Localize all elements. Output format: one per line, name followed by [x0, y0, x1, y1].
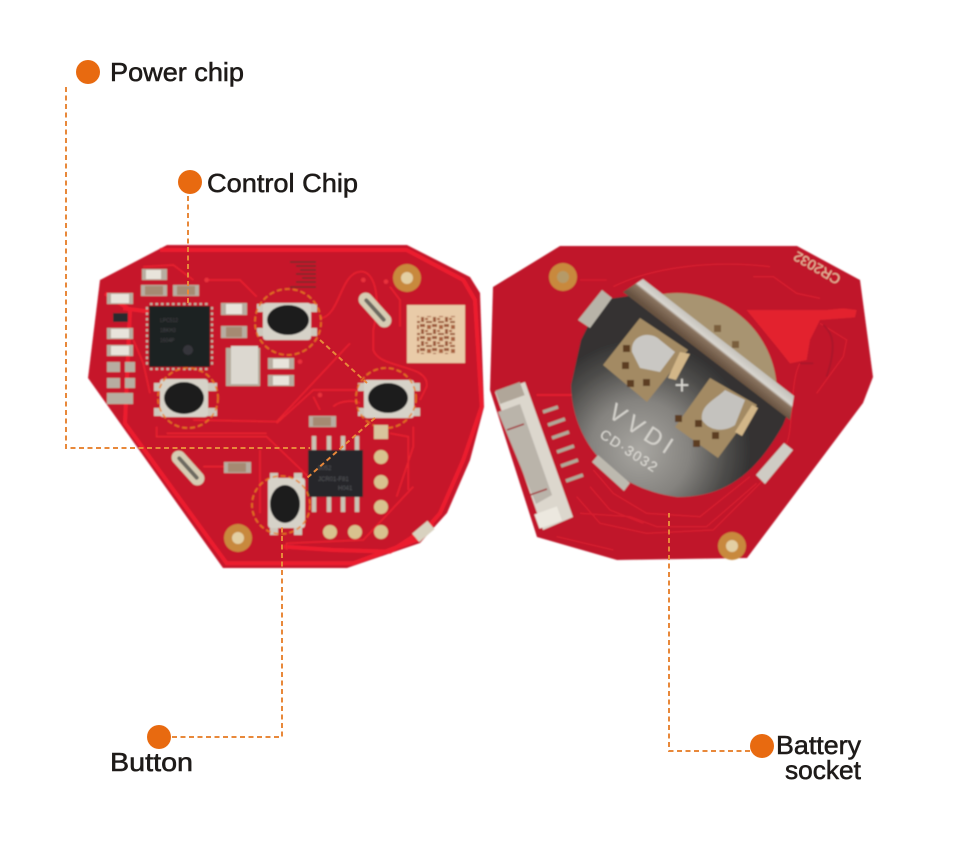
silkscreen: CR2032: CR2032 [791, 248, 843, 288]
embossed VVDI: VVDI [603, 398, 682, 462]
QR label [407, 305, 465, 363]
oval crystals [169, 290, 394, 488]
callout: Power chip [66, 57, 375, 478]
embossed cell code: CD·3032 [597, 426, 662, 476]
embossed plus sign: + [674, 370, 690, 400]
battery window 1 [603, 318, 690, 402]
battery disc behind holder [577, 293, 777, 493]
power chip: H041 [338, 486, 353, 492]
board outline [88, 245, 484, 568]
power chip: 8052 [318, 466, 332, 472]
button, left [154, 368, 218, 428]
retaining bar [623, 279, 794, 420]
button, top [255, 289, 321, 355]
callout: Battery socket: socket [785, 755, 862, 785]
callout: Battery socket [669, 513, 862, 785]
mounting hole, top [549, 263, 577, 291]
callout: Button [110, 527, 282, 777]
callout: Control Chip: Control Chip [207, 168, 358, 198]
holder tab, top [578, 290, 612, 328]
mounting hole, top [393, 264, 421, 292]
board outline [490, 246, 873, 560]
holder tab, bottom right [756, 443, 793, 484]
callout: Button: Button [110, 747, 193, 777]
battery connector [495, 382, 583, 530]
battery window 2 [675, 378, 758, 458]
power chip [308, 436, 363, 512]
control chip: LPC512 [160, 318, 178, 324]
copper traces [105, 250, 482, 563]
panel: right board, battery side [490, 246, 873, 560]
battery holder [571, 279, 794, 497]
test pads [323, 425, 388, 539]
callout: Battery socket: Battery [776, 730, 861, 760]
control chip: 1604P [160, 338, 175, 344]
mounting hole, bottom [224, 524, 252, 552]
small passive components [107, 269, 435, 542]
crystal oscillator [226, 346, 260, 386]
panel: left board, component side [88, 245, 484, 568]
callout: Control Chip [178, 168, 358, 306]
power chip: JCR01-F81 [318, 477, 349, 483]
silkscreen marks [290, 262, 316, 287]
button, bottom [252, 473, 310, 535]
control chip [147, 304, 212, 369]
button, right [356, 368, 420, 428]
holder tab, bottom left [592, 455, 630, 491]
copper traces [537, 264, 857, 550]
callout: Power chip: Power chip [110, 57, 244, 87]
control chip: 1BKH3 [160, 328, 176, 334]
mounting hole, bottom [718, 532, 746, 560]
